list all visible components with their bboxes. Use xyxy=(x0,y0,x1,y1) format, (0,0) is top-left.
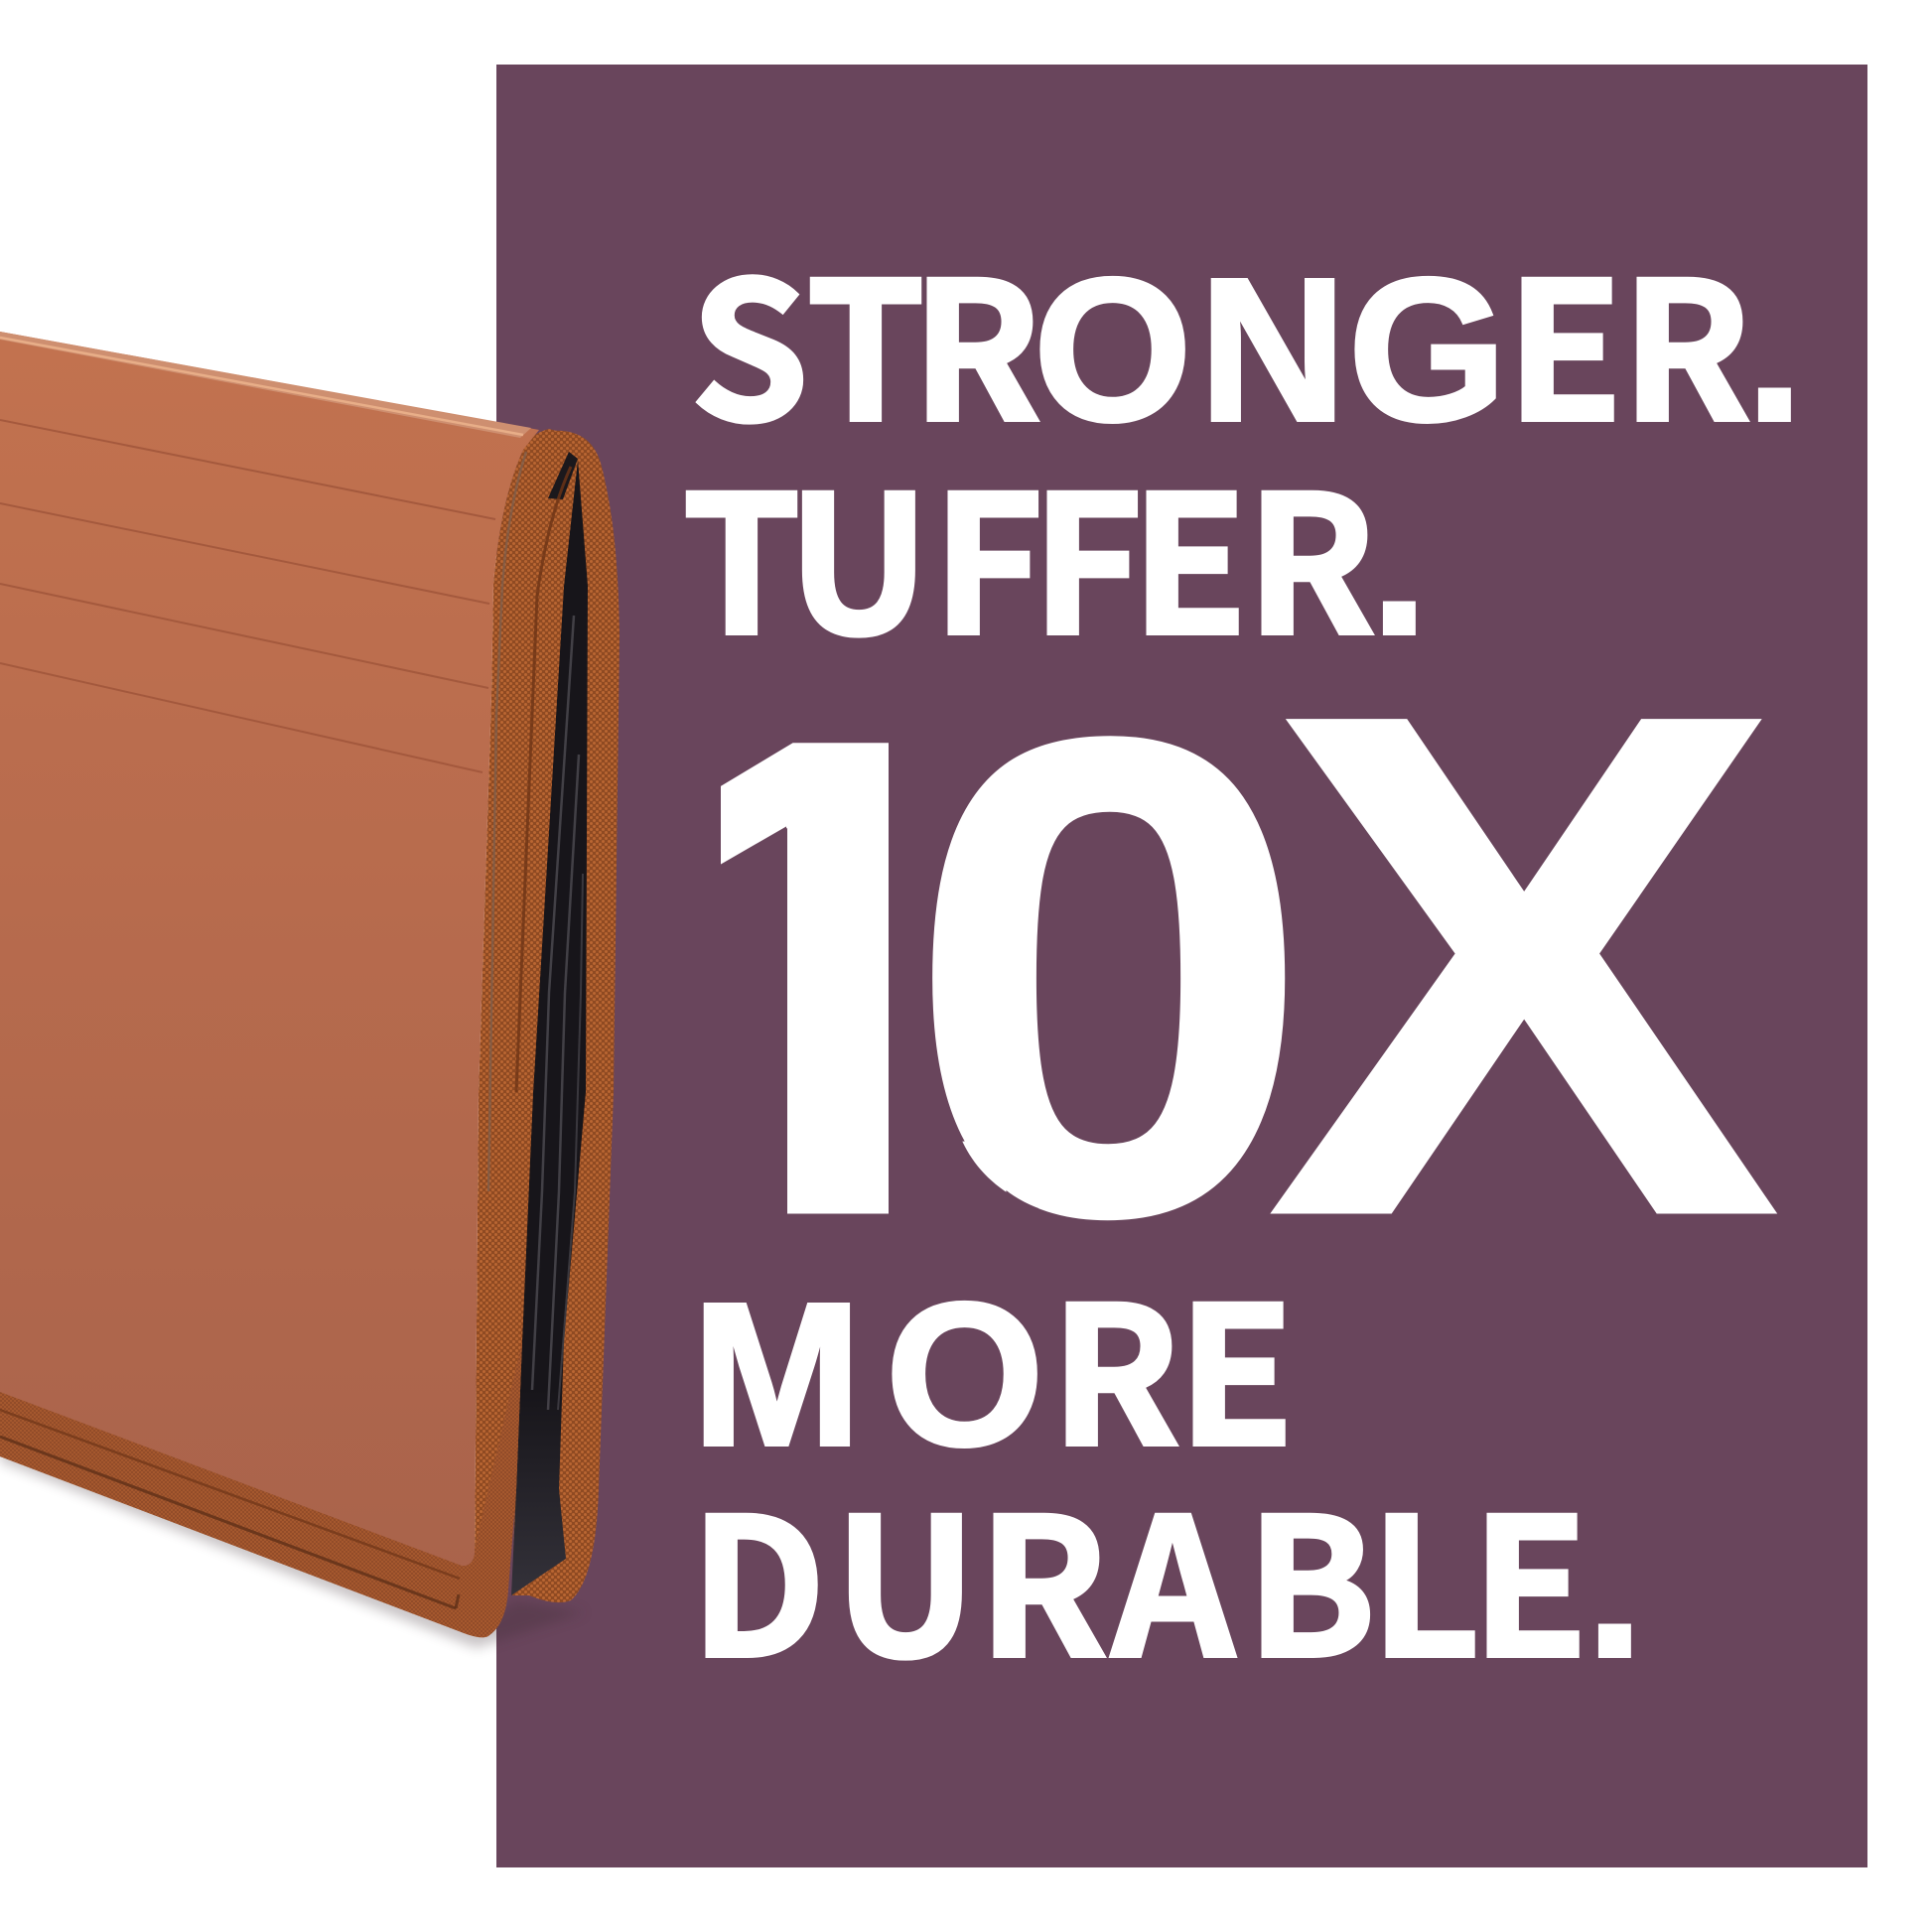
headline: tuffer: . xyxy=(1371,450,1428,677)
bottom binding weave xyxy=(0,1340,522,1637)
top edge bevel xyxy=(0,332,531,438)
product photo: expanding file folder xyxy=(0,332,620,1648)
black gusset xyxy=(511,460,588,1595)
headline: tuffer: TUFFER xyxy=(682,413,1376,689)
front cover face xyxy=(0,332,539,1566)
back cover binding xyxy=(512,431,620,1602)
panel: purple background xyxy=(496,65,1867,1867)
headline: more: RE xyxy=(1050,1224,1295,1500)
headline: stronger: . xyxy=(1746,236,1803,464)
headline: stronger: ONG xyxy=(1034,236,1506,464)
big number: 10X xyxy=(617,566,1785,1364)
headline: more: MO xyxy=(692,1261,1043,1488)
big number: 10X: X xyxy=(1266,566,1785,1364)
headline: stronger: STR xyxy=(690,200,1041,476)
flap inside black edge xyxy=(548,452,578,499)
binding seams xyxy=(0,452,571,1608)
headline: stronger: ER xyxy=(1506,200,1751,476)
big number: 10X: 0 xyxy=(905,598,1313,1357)
top edge highlight xyxy=(0,338,523,435)
front cover binding xyxy=(0,429,578,1637)
headline: durable: DURABLE xyxy=(690,1436,1588,1712)
ruled writing lines xyxy=(0,420,495,772)
folder shadow xyxy=(0,1445,586,1648)
big number: 10X: 1 xyxy=(617,598,1025,1357)
headline: durable: . xyxy=(1587,1472,1643,1700)
